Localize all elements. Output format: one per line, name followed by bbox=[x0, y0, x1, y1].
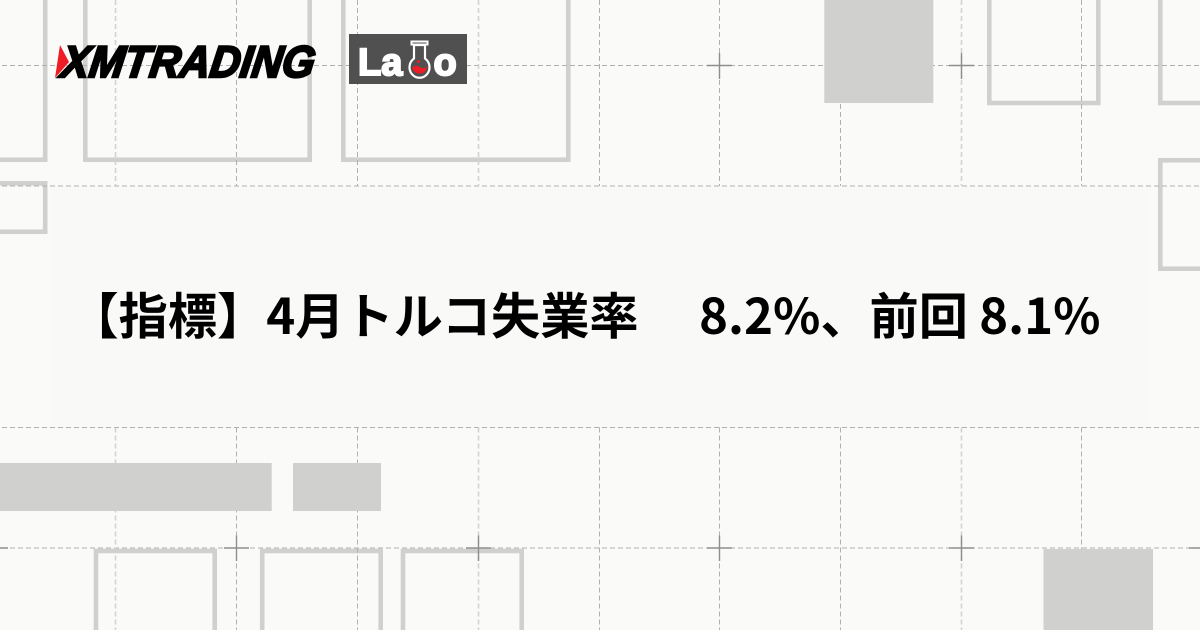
filled bar: bottom left short bbox=[293, 463, 381, 511]
filled bar: bottom left long bbox=[0, 463, 272, 511]
letters La: La bbox=[358, 42, 403, 84]
filled block: top right bbox=[824, 0, 933, 103]
outlined boxes: top right bbox=[989, 0, 1200, 269]
filled block: bottom right bbox=[1044, 549, 1153, 630]
logo: Lab bbox=[349, 34, 467, 84]
wordmark: XMTRADING bbox=[56, 38, 318, 87]
icon: red chevron bbox=[55, 45, 69, 78]
outlined boxes: top left bbox=[0, 0, 568, 232]
title: 【指標】4月トルコ失業率 8.2%、前回 8.1% bbox=[70, 278, 1100, 349]
outlined boxes: bottom bbox=[96, 551, 522, 630]
center panel bbox=[50, 187, 1150, 427]
logo: XMTRADING bbox=[55, 38, 318, 87]
icon: flask bbox=[410, 42, 430, 78]
letter o: o bbox=[434, 42, 457, 84]
logo background bbox=[349, 34, 467, 84]
